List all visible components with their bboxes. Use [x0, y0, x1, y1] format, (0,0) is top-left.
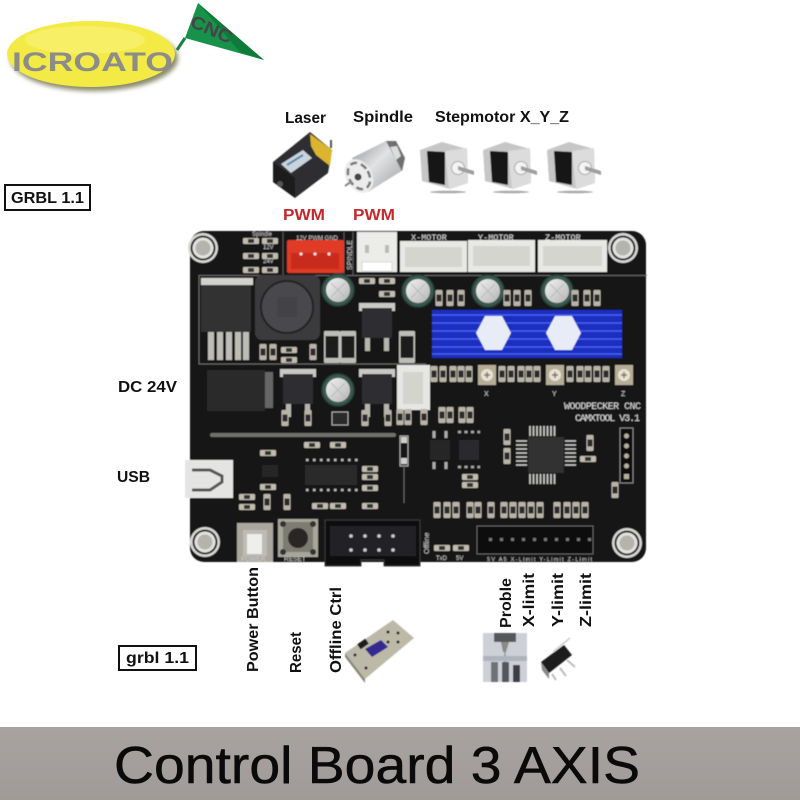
- reset button: RESET: [284, 556, 306, 563]
- badge: grbl 1.1: [119, 646, 196, 670]
- USB port: [185, 460, 233, 498]
- control board: [185, 231, 647, 566]
- white fan connector: [397, 365, 430, 410]
- label: Reset: Reset: [288, 631, 305, 673]
- icon: stepper motor Z: [547, 142, 601, 193]
- icon: spindle motor: [339, 141, 405, 198]
- heat sink: [432, 310, 622, 358]
- offline connector: Offline: [422, 532, 431, 554]
- MOSFETs: [280, 303, 395, 417]
- label: Offline Ctrl: Offline Ctrl: [328, 587, 345, 673]
- label: Power Button: Power Button: [245, 567, 262, 672]
- logo: ICROATO CNC: ICROATO: [12, 47, 173, 77]
- silkscreen: WOODPECKER CNC: CAMXTOOL V3.1: [575, 414, 640, 425]
- label: Y-limit: Y-limit: [550, 572, 567, 627]
- power button: [237, 523, 273, 563]
- icon: offline controller: [345, 620, 414, 683]
- logo: ICROATO CNC: CNC: [187, 11, 236, 48]
- power button: POWER: [241, 556, 266, 563]
- spindle voltage jumpers: 24V: [263, 259, 274, 265]
- connector: laser red: [287, 236, 344, 273]
- icon: stepper motor X: [420, 142, 474, 193]
- icon: probe photo: [483, 633, 527, 682]
- label: Stepmotor X_Y_Z: Stepmotor X_Y_Z: [435, 109, 569, 126]
- badge: GRBL 1.1: [5, 185, 90, 210]
- label: Z-limit: Z-limit: [578, 572, 595, 627]
- DC jack: [192, 367, 273, 414]
- label: Laser: Laser: [285, 110, 326, 127]
- icon: micro limit switch: [541, 638, 575, 680]
- silkscreen: WOODPECKER CNC: [564, 402, 641, 425]
- icon: stepper motor Y: [483, 142, 537, 193]
- connector: spindle white: SPINDLE: [347, 240, 354, 270]
- TXD and 5V LEDs: [434, 545, 469, 562]
- badge: grbl 1.1: grbl 1.1: [126, 650, 189, 667]
- offline connector: [325, 520, 431, 566]
- trimmers: Z: [621, 391, 626, 398]
- icon: laser module: [273, 132, 332, 198]
- connector: laser red: 12V PWM GND: [296, 236, 339, 242]
- inductor: [255, 275, 320, 340]
- ICs: [262, 431, 480, 490]
- motor connectors: Y-MOTOR: [478, 233, 514, 243]
- reset button: [278, 519, 318, 563]
- right pin header: [620, 428, 633, 483]
- footer band: [0, 727, 800, 800]
- connector: spindle white: [347, 232, 397, 272]
- limit switch header: [477, 526, 593, 563]
- silkscreen: WOODPECKER CNC: WOODPECKER CNC: [564, 402, 641, 413]
- label: Spindle: Spindle: [353, 109, 413, 126]
- motor connectors: Z-MOTOR: [545, 233, 581, 243]
- TXD and 5V LEDs: 5V: [456, 556, 463, 562]
- spindle voltage jumpers: 12V: [263, 245, 274, 251]
- mounting holes: [188, 233, 642, 558]
- label: Proble: Proble: [498, 578, 515, 628]
- voltage regulator: [201, 278, 253, 360]
- microcontroller: [516, 426, 576, 484]
- SMD components: [239, 278, 618, 518]
- label: DC 24V: DC 24V: [118, 379, 177, 396]
- TXD and 5V LEDs: TxD: [436, 556, 448, 562]
- label: USB: USB: [117, 469, 150, 486]
- label: PWM spindle: PWM: [353, 207, 395, 224]
- logo: ICROATO CNC: [7, 3, 264, 91]
- badge: GRBL 1.1: GRBL 1.1: [11, 190, 84, 207]
- motor connectors: [400, 233, 607, 272]
- footer title: Control Board 3 AXIS: [114, 737, 640, 795]
- limit switch header: 5V A5 X-Limit Y-Limit Z-Limit: [487, 557, 592, 563]
- spindle voltage jumpers: Spindle: [252, 232, 273, 238]
- gray bar and slot: [210, 433, 408, 503]
- trimmers: X: [484, 391, 489, 398]
- trimmers: Y: [552, 391, 557, 398]
- trimmers: [478, 365, 633, 398]
- label: PWM laser: PWM: [283, 207, 325, 224]
- spindle voltage jumpers: [243, 232, 278, 273]
- electrolytic capacitors: [322, 274, 573, 406]
- label: X-limit: X-limit: [521, 572, 538, 627]
- motor connectors: X-MOTOR: [411, 233, 447, 243]
